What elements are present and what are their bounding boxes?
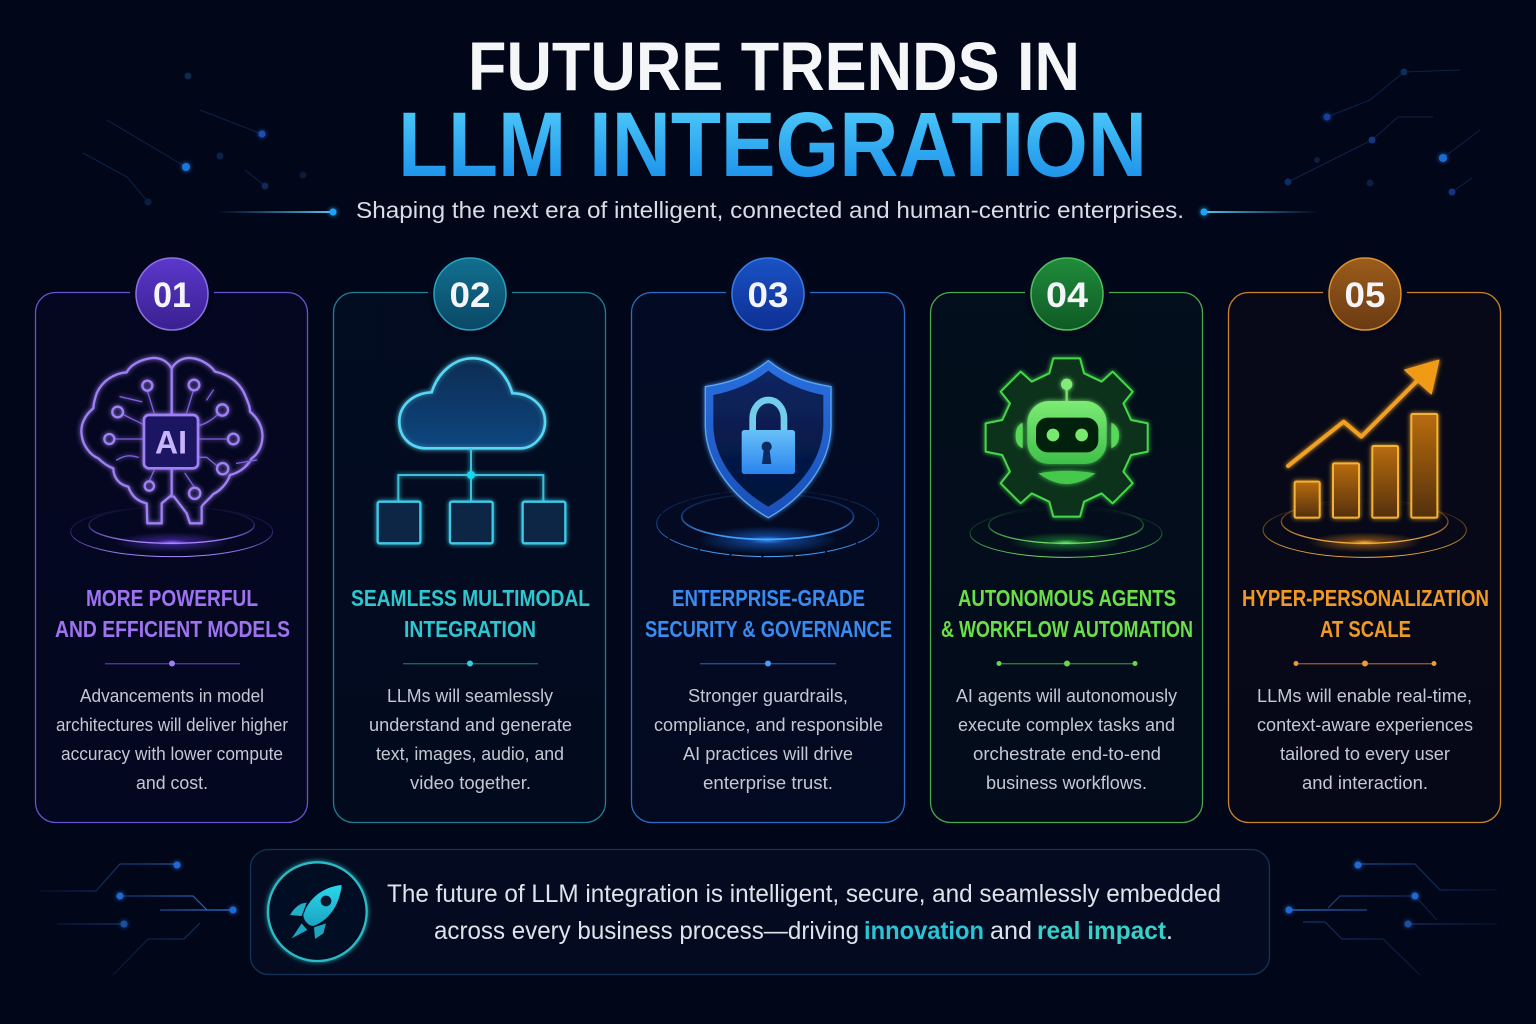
card 5 heading: AT SCALE: [1320, 616, 1411, 642]
card 4 number badge: [1025, 252, 1109, 336]
card 2 divider: [403, 660, 538, 666]
card 3 heading: SECURITY & GOVERNANCE: [645, 616, 892, 642]
panel: card 3: [632, 252, 904, 822]
icon: robot in gear: [970, 358, 1162, 557]
decorative circuits top left: [83, 72, 306, 206]
card 1 text: [56, 685, 288, 793]
icon: rocket: [268, 862, 367, 961]
title line 2: LLM INTEGRATION: [398, 94, 1147, 196]
footer message: The future of LLM integration is intelligent, secure, and seamlessly embedded: [387, 880, 1221, 908]
card 4 text: orchestrate end-to-end: [973, 743, 1161, 764]
panel: card 4: [930, 252, 1202, 822]
card 1 frame: [36, 292, 308, 822]
subtitle text: Shaping the next era of intelligent, connected and human-centric enterprises.: [356, 197, 1184, 223]
card 3 number badge: 03: [748, 276, 788, 315]
card 4 text: execute complex tasks and: [958, 714, 1175, 735]
footer frame: [250, 850, 1270, 974]
card 1 text: accuracy with lower compute: [61, 743, 283, 764]
subtitle left ornament: [215, 208, 336, 216]
card 4 frame: [930, 292, 1202, 822]
card 3 text: compliance, and responsible: [654, 714, 883, 735]
decorative circuits top right: [1284, 68, 1480, 196]
card 1 heading: AND EFFICIENT MODELS: [55, 616, 290, 642]
icon: AI brain: [71, 358, 273, 557]
card 1 text: and cost.: [136, 772, 208, 793]
card 2 heading: SEAMLESS MULTIMODAL: [351, 585, 590, 611]
card 5 text: and interaction.: [1302, 772, 1428, 793]
card 2 heading: INTEGRATION: [404, 616, 536, 642]
card 4 text: business workflows.: [986, 772, 1147, 793]
icon: shield and lock: [657, 361, 879, 557]
subtitle: [215, 197, 1320, 223]
footer message: .: [1166, 917, 1173, 945]
card 1 divider: [105, 660, 240, 666]
card 3 text: AI practices will drive: [683, 743, 853, 764]
circuit decoration: bottom right: [1286, 862, 1497, 975]
footer message: across every business process—driving: [434, 917, 859, 945]
card 3 heading: ENTERPRISE-GRADE: [672, 585, 865, 611]
card 5 text: LLMs will enable real-time,: [1257, 685, 1472, 706]
card 2 text: understand and generate: [369, 714, 572, 735]
card 5 text: [1257, 685, 1473, 793]
card 1 text: Advancements in model: [80, 685, 264, 706]
card 5 text: context-aware experiences: [1257, 714, 1473, 735]
card 2 text: video together.: [410, 772, 531, 793]
card 2 heading: [351, 585, 590, 642]
panel: card 2: [334, 252, 606, 822]
card 1 number badge: [130, 252, 214, 336]
card 3 frame: [632, 292, 904, 822]
footer message: and: [990, 917, 1032, 945]
card 2 text: [369, 685, 572, 793]
card 2 number badge: 02: [450, 276, 490, 315]
card 4 text: AI agents will autonomously: [956, 685, 1178, 706]
card 5 number badge: 05: [1344, 276, 1386, 315]
card 3 text: enterprise trust.: [703, 772, 833, 793]
card 1 number badge: 01: [153, 276, 191, 315]
title line 1: FUTURE TRENDS IN: [468, 28, 1080, 105]
card 5 text: tailored to every user: [1280, 743, 1450, 764]
card 5 heading: [1242, 585, 1489, 642]
card 1 text: architectures will deliver higher: [56, 714, 288, 735]
panel: footer banner: [250, 850, 1270, 974]
icon: cloud network: [378, 358, 565, 543]
card 5 number badge: [1323, 252, 1407, 336]
card 4 heading: [941, 585, 1193, 642]
card 2 number badge: [428, 252, 512, 336]
card 5 divider: [1294, 660, 1436, 666]
card 3 text: [654, 685, 883, 793]
card 2 frame: [334, 292, 606, 822]
card 2 text: LLMs will seamlessly: [387, 685, 554, 706]
title: [398, 28, 1147, 196]
footer message: [387, 880, 1221, 945]
icon: AI brain: AI: [155, 424, 187, 460]
card 3 heading: [645, 585, 892, 642]
card 1 heading: MORE POWERFUL: [86, 585, 258, 611]
footer message: real impact: [1037, 917, 1167, 945]
subtitle right ornament: [1200, 208, 1320, 216]
card 4 heading: & WORKFLOW AUTOMATION: [941, 616, 1193, 642]
card 3 number badge: [726, 252, 810, 336]
panel: card 5: [1228, 252, 1500, 822]
card 5 frame: [1228, 292, 1500, 822]
card 4 number badge: 04: [1046, 276, 1089, 315]
circuit decoration: bottom left: [40, 862, 236, 975]
card 1 heading: [55, 585, 290, 642]
footer message: innovation: [864, 917, 984, 945]
panel: card 1: [36, 252, 308, 822]
card 3 text: Stronger guardrails,: [688, 685, 848, 706]
icon: growth chart: [1263, 360, 1466, 557]
card 3 divider: [700, 660, 836, 666]
card 2 text: text, images, audio, and: [376, 743, 564, 764]
card 4 divider: [996, 660, 1138, 666]
card 4 text: [956, 685, 1178, 793]
card 4 heading: AUTONOMOUS AGENTS: [958, 585, 1176, 611]
